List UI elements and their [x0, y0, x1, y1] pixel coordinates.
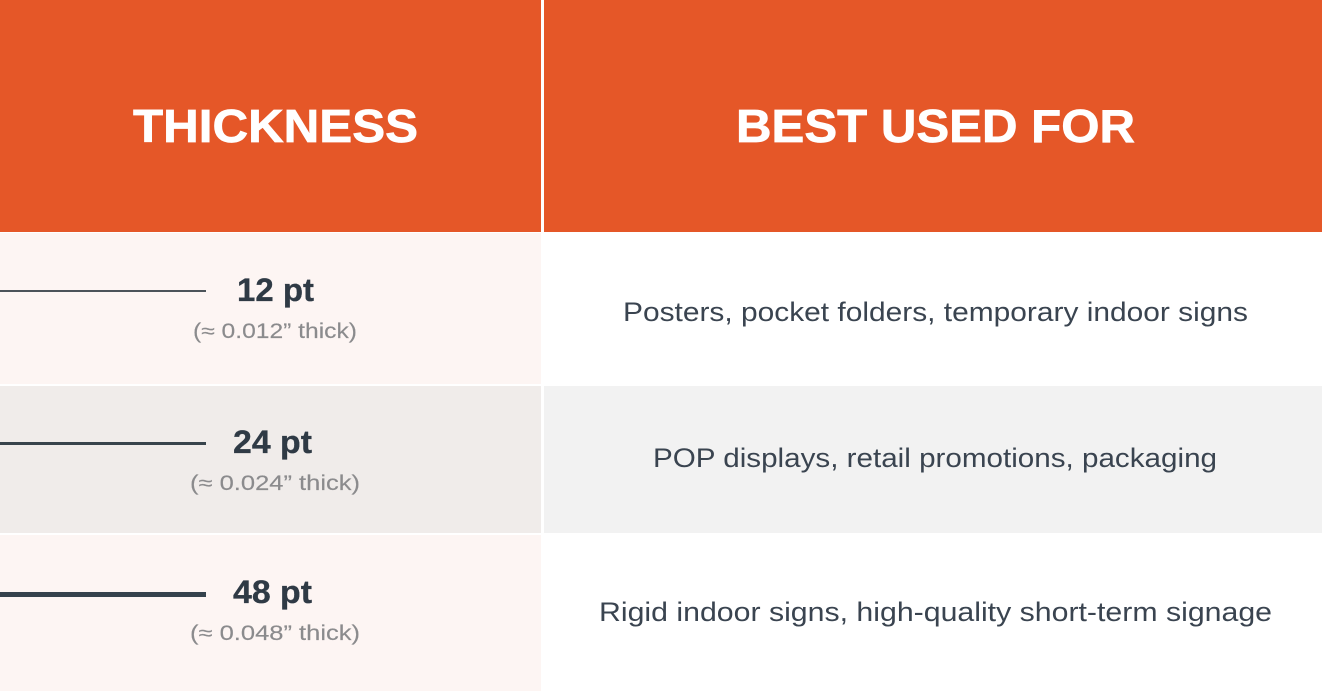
panel: 48 pt thickness row [0, 535, 541, 691]
line sample: 12 pt [0, 290, 206, 292]
heading: best used for: BEST USED FOR [736, 100, 1135, 152]
panel: 24 pt use [544, 386, 1322, 533]
panel: 24 pt thickness row [0, 386, 541, 533]
line sample: 24 pt [0, 442, 206, 445]
label: 12 pt: 12 pt [237, 272, 314, 308]
text: 24 pt use: POP displays, retail promotions, packaging [653, 443, 1217, 473]
note: 24 pt measurement: (≈ 0.024” thick) [190, 472, 360, 495]
label: 48 pt: 48 pt [233, 574, 312, 610]
text: 12 pt use: Posters, pocket folders, temporary indoor signs [623, 297, 1248, 327]
note: 12 pt measurement: (≈ 0.012” thick) [193, 320, 357, 343]
text: 48 pt use: Rigid indoor signs, high-quality short-term signage [599, 597, 1272, 627]
panel: best used for column header [544, 0, 1322, 232]
line sample: 48 pt [0, 592, 206, 597]
panel: thickness column header [0, 0, 541, 232]
panel: 12 pt thickness row [0, 233, 541, 384]
note: 48 pt measurement: (≈ 0.048” thick) [190, 622, 360, 645]
heading: thickness: THICKNESS [133, 100, 418, 152]
panel: 48 pt use [544, 535, 1322, 691]
panel: 12 pt use [544, 233, 1322, 384]
label: 24 pt: 24 pt [233, 424, 312, 460]
